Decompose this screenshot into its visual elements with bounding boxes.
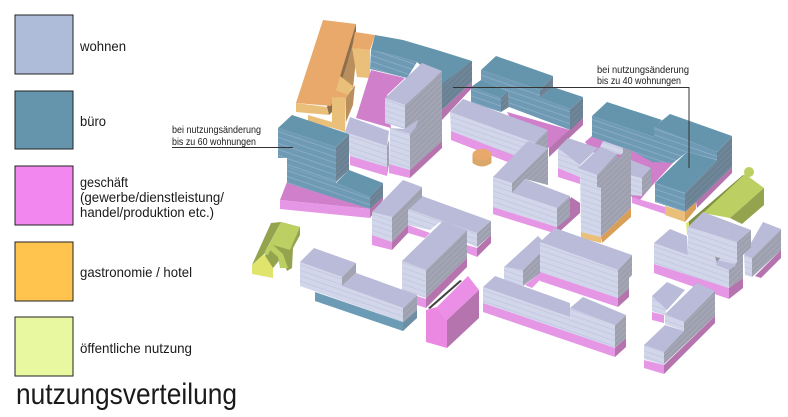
building: blue office with 60 units: [278, 115, 383, 218]
callout: 40 wohnungen: bis zu 40 wohnungen: [597, 76, 681, 87]
legend item: geschäft: [15, 166, 224, 225]
legend item: öffentliche nutzung: öffentliche nutzung: [80, 340, 192, 356]
building: orange connector: [352, 32, 375, 78]
building: blue office block, top centre: [471, 56, 583, 157]
legend item: büro: büro: [80, 113, 106, 129]
legend item: wohnen: [15, 15, 126, 74]
legend item: wohnen: wohnen: [79, 38, 126, 54]
rotunda: [472, 149, 492, 166]
callout: 40 wohnungen: [453, 65, 689, 168]
building: residential group, right: [654, 212, 751, 299]
building: blue office with 40 units: [592, 102, 732, 222]
building: curved blue office: [356, 35, 472, 128]
building: pink plaza: [585, 135, 673, 214]
building: small residential behind blue block: [631, 160, 651, 196]
building: green public building, left: [252, 222, 300, 278]
legend item: geschäft: handel/produktion etc.): [80, 204, 214, 220]
title: nutzungsverteilung: [16, 378, 237, 411]
building: pink house: [426, 276, 479, 348]
building: residential bar, bottom right: [644, 282, 715, 374]
legend item: gastronomie / hotel: [15, 242, 192, 301]
building: orange long block: [296, 20, 356, 132]
building: low residential beside tower: [558, 138, 598, 184]
callout: 60 wohnungen: [172, 125, 293, 148]
legend item: büro: [15, 91, 106, 149]
callout: 60 wohnungen: bis zu 60 wohnungen: [172, 137, 256, 148]
building: small residential, far right: [744, 222, 781, 278]
building: long residential, centre: [450, 99, 548, 166]
isometric building massing: [252, 20, 781, 374]
callout: 40 wohnungen: bei nutzungsänderung: [597, 65, 689, 76]
legend item: geschäft: geschäft: [80, 174, 128, 190]
building: tall residential tower: [385, 63, 442, 178]
building: U-shaped residential, bottom centre: [483, 228, 632, 357]
building: T-shaped residential, centre: [493, 141, 580, 234]
legend item: gastronomie / hotel: gastronomie / hotel: [80, 264, 192, 280]
legend item: öffentliche nutzung: [15, 317, 192, 376]
building: green public building, right: [686, 167, 764, 235]
legend: [15, 15, 224, 376]
building: U-shaped residential, left centre: [372, 180, 491, 308]
legend item: geschäft: (gewerbe/dienstleistung/: [80, 189, 224, 205]
building: residential next to courtyard: [345, 117, 389, 176]
building: residential with blue base, bottom left: [300, 248, 417, 331]
callout: 60 wohnungen: bei nutzungsänderung: [172, 125, 261, 136]
building: tower with orange base: [578, 131, 631, 243]
